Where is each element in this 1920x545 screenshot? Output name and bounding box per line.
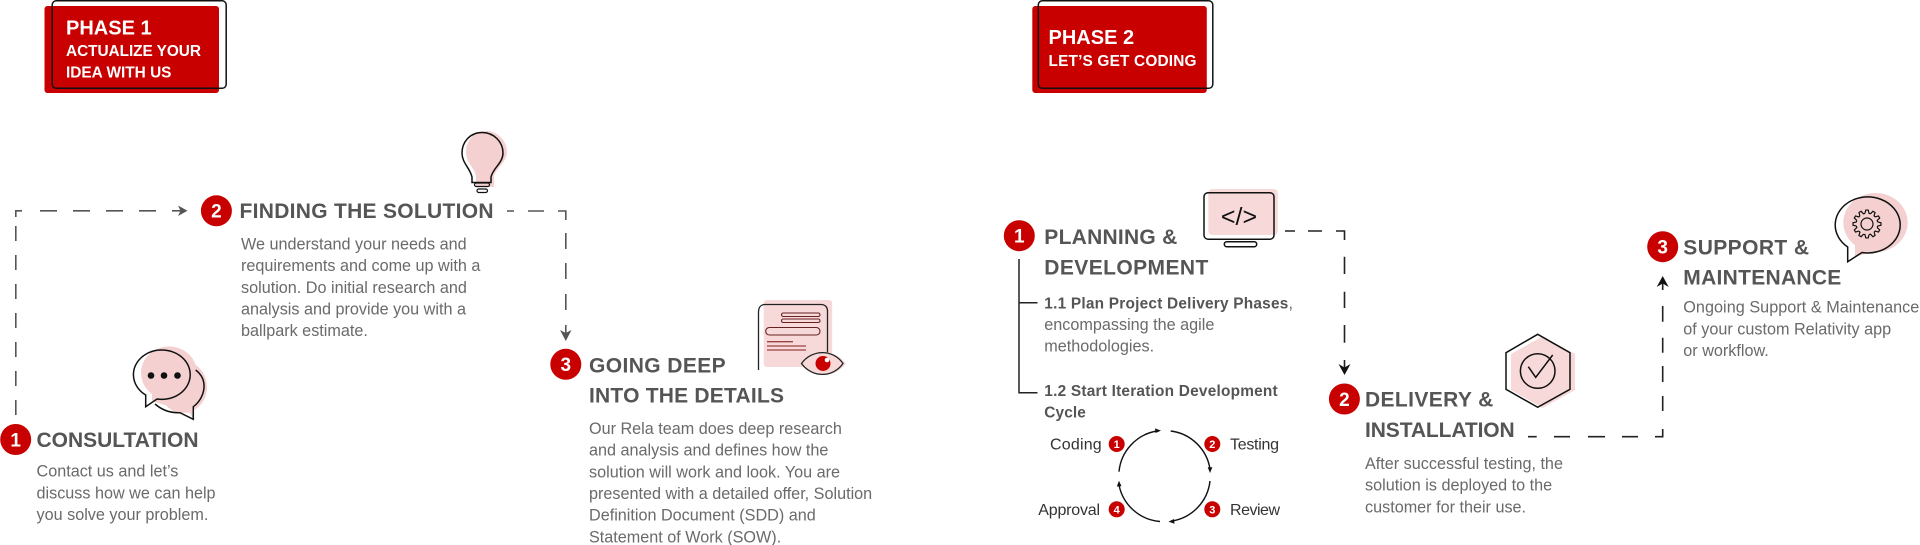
number badge 1 <box>1004 220 1035 251</box>
cycle step: testing: Testing <box>1230 436 1279 453</box>
sub-step 1.2: 1.2 Start Iteration Development <box>1044 383 1278 400</box>
number badge 2 <box>201 195 232 226</box>
step 2-2: delivery and installation <box>1329 334 1575 516</box>
step 3: going deep into the details <box>550 300 872 545</box>
heading: support and maintenance <box>1683 236 1841 290</box>
description: finding the solution: We understand your needs and <box>241 236 467 254</box>
panel: phase 1 banner: ACTUALIZE YOUR <box>66 43 201 60</box>
icon: hexagon check <box>1506 334 1575 408</box>
description: consultation: you solve your problem. <box>36 506 208 524</box>
number badge 1 <box>0 424 31 455</box>
cycle step: testing <box>1204 436 1279 453</box>
heading: going deep into the details <box>589 355 784 408</box>
number badge 2: 2 <box>211 202 222 223</box>
number badge 3: 3 <box>1657 238 1668 258</box>
heading: consultation: CONSULTATION <box>36 429 198 452</box>
panel: phase 2 banner <box>1032 1 1213 93</box>
icon: code monitor <box>1204 189 1278 247</box>
description: going deep: presented with a detailed offer, Solution <box>589 485 872 503</box>
description: delivery: solution is deployed to the <box>1365 477 1552 495</box>
sub-step 1.2 <box>1044 383 1278 421</box>
heading: delivery and installation: DELIVERY & <box>1365 389 1493 412</box>
heading: finding the solution: FINDING THE SOLUTION <box>240 200 494 223</box>
number badge 1: 1 <box>10 430 21 451</box>
heading: planning and development <box>1044 226 1208 279</box>
icon: chat bubbles <box>133 346 207 419</box>
description: going deep <box>589 420 872 545</box>
cycle step: approval: Approval <box>1038 502 1100 519</box>
description: going deep: and analysis and defines how the <box>589 442 828 460</box>
cycle step: testing: 2 <box>1209 439 1215 451</box>
arrow: delivery to support <box>1528 276 1669 437</box>
sub-step 1.1: methodologies. <box>1044 338 1154 356</box>
heading: delivery and installation: INSTALLATION <box>1365 419 1515 442</box>
cycle step: coding: Coding <box>1050 436 1102 453</box>
step 2: finding the solution <box>201 131 507 340</box>
description: finding the solution: ballpark estimate. <box>241 322 368 340</box>
panel: phase 1 banner <box>44 1 226 93</box>
description: consultation: discuss how we can help <box>36 484 216 502</box>
description: finding the solution: solution. Do initial research and <box>241 279 467 297</box>
cycle step: coding: 1 <box>1114 439 1120 451</box>
gear <box>1853 210 1881 238</box>
description: finding the solution <box>241 236 480 340</box>
description: finding the solution: analysis and provide you with a <box>241 300 466 318</box>
icon: document with eye <box>758 300 846 375</box>
step 2-1: planning and development <box>1004 189 1293 524</box>
number badge 3 <box>550 349 581 380</box>
step 1: consultation <box>0 346 216 524</box>
heading: planning and development: DEVELOPMENT <box>1044 256 1208 279</box>
number badge 3 <box>1647 231 1678 262</box>
arrow: consultation to finding the solution <box>16 206 187 415</box>
panel: phase 2 banner: PHASE 2 <box>1048 27 1134 49</box>
description: going deep: Our Rela team does deep research <box>589 420 842 438</box>
description: delivery: After successful testing, the <box>1365 455 1563 473</box>
cycle step: review: 3 <box>1209 504 1215 516</box>
sub-step 1.1 <box>1044 294 1293 356</box>
cycle step: coding <box>1050 436 1125 453</box>
heading: planning and development: PLANNING & <box>1044 226 1177 249</box>
number badge 2: 2 <box>1339 390 1350 411</box>
heading: going deep into the details: GOING DEEP <box>589 355 726 378</box>
icon: speech bubble with gear <box>1835 193 1908 262</box>
heading: support and maintenance: MAINTENANCE <box>1683 267 1841 290</box>
panel: phase 1 banner: IDEA WITH US <box>66 64 171 82</box>
heading: delivery and installation <box>1365 389 1515 442</box>
cycle step: approval: 4 <box>1114 504 1121 516</box>
description: delivery <box>1365 455 1563 516</box>
description: support: or workflow. <box>1683 342 1769 360</box>
description: going deep: Definition Document (SDD) and <box>589 507 816 525</box>
description: delivery: customer for their use. <box>1365 498 1526 516</box>
description: consultation: Contact us and let’s <box>36 462 178 480</box>
number badge 3: 3 <box>561 355 571 376</box>
description: support: of your custom Relativity app <box>1683 320 1891 338</box>
step 2-3: support and maintenance <box>1647 193 1919 360</box>
tree connector <box>1019 259 1038 393</box>
arrow: finding the solution to going deep <box>507 211 572 341</box>
description: support: Ongoing Support & Maintenance <box>1683 299 1919 317</box>
heading: going deep into the details: INTO THE DETAILS <box>589 384 784 408</box>
heading: support and maintenance: SUPPORT & <box>1683 236 1809 259</box>
cycle step: approval <box>1038 501 1125 519</box>
icon: code monitor: </> <box>1221 203 1257 231</box>
panel: phase 2 banner: LET’S GET CODING <box>1048 53 1197 70</box>
icon: light bulb <box>462 131 507 192</box>
description: support <box>1683 299 1919 360</box>
cycle arrows <box>1117 428 1212 524</box>
description: consultation <box>36 462 216 524</box>
arrow: planning to delivery <box>1285 231 1350 375</box>
sub-step 1.1: encompassing the agile <box>1044 316 1214 334</box>
iteration cycle diagram <box>1038 428 1280 524</box>
panel: phase 1 banner: PHASE 1 <box>66 18 152 40</box>
number badge 1: 1 <box>1014 226 1025 248</box>
description: going deep: solution will work and look. You are <box>589 463 840 481</box>
number badge 2 <box>1329 384 1360 414</box>
sub-step 1.1: 1.1 Plan Project Delivery Phases, <box>1044 294 1293 312</box>
cycle step: review: Review <box>1230 502 1280 519</box>
cycle step: review <box>1204 501 1280 519</box>
description: finding the solution: requirements and come up with a <box>241 257 480 275</box>
sub-step 1.2: Cycle <box>1044 404 1086 421</box>
